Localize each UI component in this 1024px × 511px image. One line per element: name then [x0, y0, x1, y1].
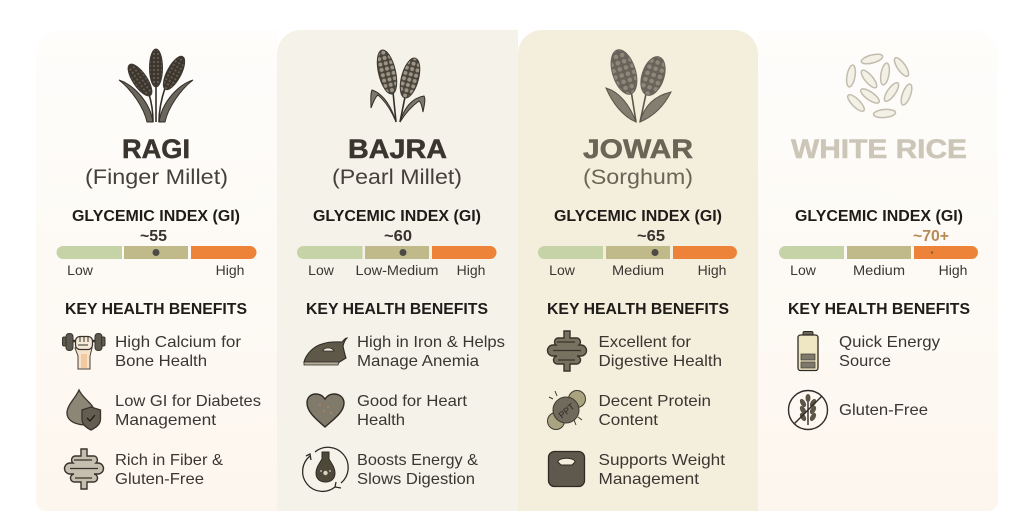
heading: benefits: KEY HEALTH BENEFITS [306, 301, 488, 318]
icon: battery [798, 332, 818, 370]
icon: ragi plant [119, 49, 193, 122]
text: benefit 1: Digestive Health [598, 353, 722, 370]
title: jowar: JOWAR [583, 134, 693, 164]
scale labels: Medium [612, 262, 664, 278]
value: ~55: ~55 [140, 228, 167, 245]
gi scale bar [297, 246, 497, 259]
scale labels: Low [790, 262, 817, 278]
text: benefit 1 [839, 334, 940, 370]
text: benefit 3: Slows Digestion [357, 471, 475, 488]
text: benefit 3 [357, 452, 478, 488]
text: benefit 2: Content [598, 412, 659, 429]
text: benefit 1: Manage Anemia [357, 353, 479, 370]
icon: heart [307, 394, 344, 427]
value: ~65: ~65 [637, 228, 665, 245]
scale labels [790, 262, 967, 278]
heading: glycemic index: GLYCEMIC INDEX (GI) [554, 208, 722, 225]
text: benefit 1: High in Iron & Helps [357, 334, 505, 351]
gi scale bar [779, 246, 978, 259]
text: benefit 2: Gluten-Free [839, 402, 928, 419]
icon: energy cycle [303, 447, 348, 491]
subtitle: finger millet: (Finger Millet) [85, 166, 228, 189]
scale labels: High [939, 262, 967, 278]
icon: protein [548, 390, 586, 430]
heading: benefits: KEY HEALTH BENEFITS [788, 301, 970, 318]
panel: jowar [518, 30, 758, 511]
title: ragi: RAGI [122, 134, 190, 164]
gi scale bar [538, 246, 737, 259]
icon: digestive tract [548, 331, 586, 371]
panel: bajra [277, 30, 518, 511]
heading: glycemic index: GLYCEMIC INDEX (GI) [72, 208, 240, 225]
text: benefit 1: Quick Energy [839, 334, 940, 351]
text: benefit 3 [115, 452, 223, 488]
text: benefit 1: High Calcium for [115, 334, 242, 351]
text: benefit 2: Good for Heart [357, 393, 468, 410]
value: ~60: ~60 [384, 228, 412, 245]
text: benefit 1: Excellent for [598, 334, 692, 351]
icon: gluten free [788, 390, 828, 430]
scale labels: Low [67, 262, 94, 278]
scale labels: High [216, 262, 244, 278]
text: benefit 1: Source [839, 353, 891, 370]
scale labels [67, 262, 244, 278]
scale labels: Low [549, 262, 576, 278]
scale labels: Low [308, 262, 335, 278]
title: white rice: WHITE RICE [791, 134, 967, 164]
text: benefit 2: Decent Protein [598, 393, 711, 410]
scale labels: High [457, 262, 485, 278]
icon: drop and shield [67, 390, 100, 430]
text: benefit 3: Boosts Energy & [357, 452, 478, 469]
heading: glycemic index: GLYCEMIC INDEX (GI) [313, 208, 481, 225]
icon: dumbbell and fist [62, 334, 105, 369]
text: benefit 3 [598, 452, 726, 488]
scale labels: Low-Medium [356, 262, 438, 278]
panel: ragi [36, 30, 277, 511]
text: benefit 3: Gluten-Free [115, 471, 204, 488]
text: benefit 2 [598, 393, 711, 429]
text: benefit 1: Bone Health [115, 353, 207, 370]
text: benefit 3: Rich in Fiber & [115, 452, 223, 469]
subtitle: pearl millet: (Pearl Millet) [332, 166, 462, 189]
text: benefit 2 [115, 393, 261, 429]
heading: benefits: KEY HEALTH BENEFITS [65, 301, 247, 318]
panel: white rice [758, 30, 998, 511]
text: benefit 1 [357, 334, 505, 370]
text: benefit 2: Management [115, 412, 217, 429]
icon: clothes iron [304, 338, 347, 365]
icon: weighing scale [548, 452, 584, 486]
scale labels: High [698, 262, 726, 278]
gi scale bar [57, 246, 257, 259]
value: ~70+: ~70+ [913, 228, 949, 245]
text: benefit 2 [357, 393, 468, 429]
text: benefit 3: Supports Weight [598, 452, 726, 469]
text: benefit 3: Management [598, 471, 700, 488]
heading: glycemic index: GLYCEMIC INDEX (GI) [795, 208, 963, 225]
text: benefit 1 [598, 334, 722, 370]
icon: intestine [64, 449, 104, 489]
scale labels: Medium [853, 262, 905, 278]
text: benefit 2: Health [357, 412, 405, 429]
text: benefit 1 [115, 334, 242, 370]
scale labels [308, 262, 485, 278]
icon: rice grains [845, 52, 914, 118]
icon: protein: PPT [557, 401, 577, 420]
icon: bajra plant [371, 48, 425, 122]
text: benefit 2: Low GI for Diabetes [115, 393, 261, 410]
subtitle: sorghum: (Sorghum) [583, 166, 693, 189]
title: bajra: BAJRA [348, 134, 447, 164]
icon: jowar plant [606, 47, 671, 122]
heading: benefits: KEY HEALTH BENEFITS [547, 301, 729, 318]
scale labels [549, 262, 726, 278]
